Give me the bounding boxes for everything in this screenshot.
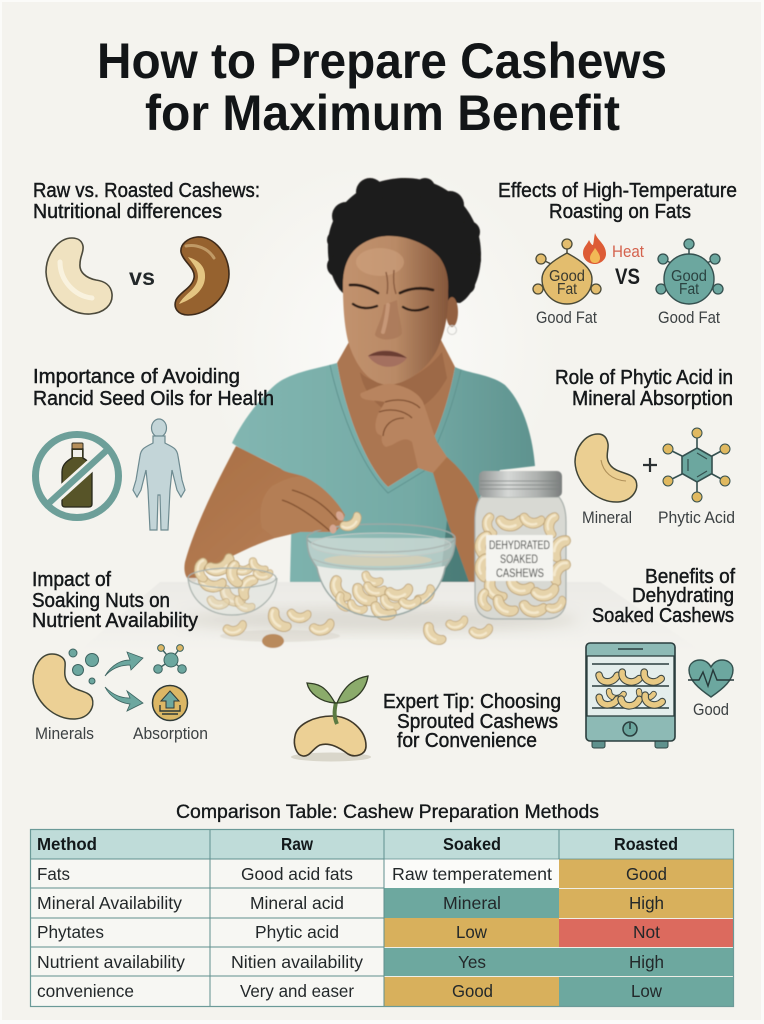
icon: gold fat molecule: [533, 239, 601, 304]
table header row: Method: [37, 834, 97, 854]
jar label: DEHYDRATED: [489, 540, 550, 552]
icon: teal fat molecule: Fat: [679, 281, 700, 298]
row: phytates: Phytates: [37, 922, 104, 942]
heading: expert tip: for Convenience: [397, 730, 537, 752]
woman's hair: [327, 178, 481, 303]
heading: phytic acid: [555, 367, 733, 410]
icon: roasted cashew: [175, 237, 229, 315]
icon: mineral cashew with dots: [33, 649, 98, 719]
heading: soaking: Impact of: [32, 569, 111, 591]
icon: raw cashew: [46, 238, 112, 314]
icon: gold fat molecule: Good: [549, 268, 585, 285]
forehead highlight: [356, 248, 404, 276]
panel: dehydrating benefits: [586, 566, 735, 748]
vs label: VS: [615, 264, 640, 289]
row: phytates: Low: [456, 922, 487, 942]
icon: molecule: [154, 645, 186, 673]
row: convenience: [30, 976, 733, 1006]
label: good fat right: Good Fat: [658, 309, 720, 327]
table header row: Raw: [281, 834, 313, 854]
row: mineral availability: High: [629, 893, 664, 913]
row: nutrient availability: [30, 947, 733, 976]
heading: dehydrating: Dehydrating: [632, 585, 734, 607]
table surface: [80, 582, 700, 650]
title: for Maximum Benefit: [145, 84, 620, 141]
jar label: CASHEWS: [496, 568, 544, 580]
label: good fat left: Good Fat: [536, 309, 597, 327]
neck and chest: [337, 338, 455, 487]
row: mineral availability: Mineral: [443, 893, 501, 913]
vs label: vs: [129, 264, 155, 290]
ear: [446, 297, 458, 327]
icon: absorption: [152, 686, 188, 720]
chin hand: [360, 384, 447, 473]
row: mineral availability: [30, 888, 733, 918]
nose ridge: [383, 305, 388, 332]
row: convenience: convenience: [37, 981, 134, 1001]
central photo: woman with cashews: [80, 178, 700, 650]
resting forearm: [413, 437, 480, 582]
table grid lines: [30, 829, 734, 1006]
row: nutrient availability: Nutrient availability: [37, 952, 185, 972]
row: nutrient availability: Yes: [458, 952, 486, 972]
panel: raw vs roasted cashews: [33, 180, 260, 315]
panel: soaking and nutrient availability: [32, 569, 208, 743]
reaching arm: [184, 446, 345, 582]
row: convenience: Good: [452, 981, 493, 1001]
neck shadow: [360, 352, 447, 413]
loose cashews on table: [220, 604, 495, 648]
panel: expert tip sprouted cashews: [291, 676, 561, 762]
face: [343, 236, 448, 385]
label: heat: Heat: [612, 243, 644, 261]
icon: gold fat molecule: Fat: [557, 281, 578, 298]
jar label: [486, 535, 553, 581]
row: convenience: Very and easer: [240, 981, 354, 1001]
large glass bowl of soaking cashews: [307, 524, 455, 621]
panel: high temperature roasting: [498, 180, 737, 327]
heading: roasting on fats: [498, 180, 737, 223]
heading: rancid seed oils: Importance of Avoiding: [33, 366, 240, 388]
small bowl of cashews: [188, 547, 277, 615]
row: phytates: [30, 918, 733, 947]
row: phytates: Not: [633, 922, 660, 942]
comparison table: [30, 829, 734, 1006]
shirt lower shadow right: [440, 520, 469, 582]
row: mineral availability: Mineral acid: [250, 893, 344, 913]
icon: human body: [133, 419, 185, 530]
plus sign: [643, 458, 657, 472]
row: fats: Good: [626, 864, 667, 884]
panel: phytic acid: [555, 367, 735, 527]
row: nutrient availability: High: [629, 952, 664, 972]
table edge covering torso: [196, 582, 480, 586]
label: good: Good: [693, 701, 729, 719]
icon: teal fat molecule: Good: [671, 268, 707, 285]
label: minerals: Minerals: [35, 725, 94, 743]
heading: roasting on fats: Roasting on Fats: [549, 201, 691, 223]
jar label: SOAKED: [500, 554, 538, 566]
heading: rancid seed oils: [33, 366, 274, 410]
label: mineral: Mineral: [582, 509, 632, 527]
t-shirt: [232, 363, 535, 582]
heading: rancid seed oils: Rancid Seed Oils for Health: [33, 388, 274, 410]
heading: phytic acid: Role of Phytic Acid in: [555, 367, 733, 389]
heading: expert tip: [383, 691, 561, 752]
heading: phytic acid: Mineral Absorption: [572, 388, 733, 410]
heading: raw vs roasted: Raw vs. Roasted Cashews:: [33, 180, 260, 202]
table shadows: [180, 608, 580, 632]
brow furrow: [386, 270, 396, 294]
heading: raw vs roasted: [33, 180, 260, 223]
shirt collar line: [330, 365, 461, 493]
icon: sprouted cashew: [291, 676, 371, 762]
earring: [448, 326, 456, 334]
heading: expert tip: Sprouted Cashews: [397, 711, 558, 733]
title: How to Prepare Cashews: [97, 32, 667, 89]
jar lid: [479, 471, 562, 497]
icon: dehydrator: [586, 643, 675, 748]
arrow: to molecule: [105, 652, 143, 676]
row: fats: Raw temperatement: [392, 864, 552, 884]
icon: heart with pulse: [688, 660, 734, 697]
lips: [368, 350, 407, 367]
heading: roasting on fats: Effects of High-Temperature: [498, 180, 737, 202]
icon: teal fat molecule: [656, 239, 723, 304]
nose: [375, 300, 402, 339]
heading: soaking: Nutrient Availability: [32, 610, 198, 632]
row: mineral availability: Mineral Availability: [37, 893, 182, 913]
eyes: [353, 304, 428, 310]
heading: expert tip: Expert Tip: Choosing: [383, 691, 561, 713]
panel: rancid seed oils: [33, 366, 274, 530]
heading: soaking: Soaking Nuts on: [32, 590, 170, 612]
heading: raw vs roasted: Nutritional differences: [33, 201, 222, 223]
icon: phytic acid molecule: [663, 428, 730, 502]
title: [97, 32, 667, 141]
table header row: Roasted: [614, 834, 678, 854]
heading: dehydrating: Soaked Cashews: [592, 605, 734, 627]
row: nutrient availability: Nitien availability: [231, 952, 363, 972]
glass jar of dehydrated soaked cashews: [471, 471, 571, 620]
heading: dehydrating: Benefits of: [645, 566, 735, 588]
label: absorption: Absorption: [133, 725, 208, 743]
table header row: [30, 829, 733, 859]
row: convenience: Low: [631, 981, 662, 1001]
row: phytates: Phytic acid: [255, 922, 339, 942]
icon: no oil bottle: [36, 434, 118, 518]
row: fats: Fats: [37, 864, 70, 884]
label: phytic acid: Phytic Acid: [658, 509, 735, 527]
row: fats: [30, 859, 733, 888]
arrow: to absorption: [105, 687, 143, 711]
icon: mineral cashew: [575, 434, 637, 502]
table header row: Soaked: [443, 834, 501, 854]
icon: flame: [583, 233, 606, 264]
row: fats: Good acid fats: [241, 864, 353, 884]
heading: soaking: [32, 569, 198, 632]
heading: dehydrating: [592, 566, 735, 627]
reaching fingers with cashew: [260, 477, 364, 538]
brows: [350, 285, 433, 293]
table title: Comparison Table: Cashew Preparation Methods: [176, 801, 599, 823]
